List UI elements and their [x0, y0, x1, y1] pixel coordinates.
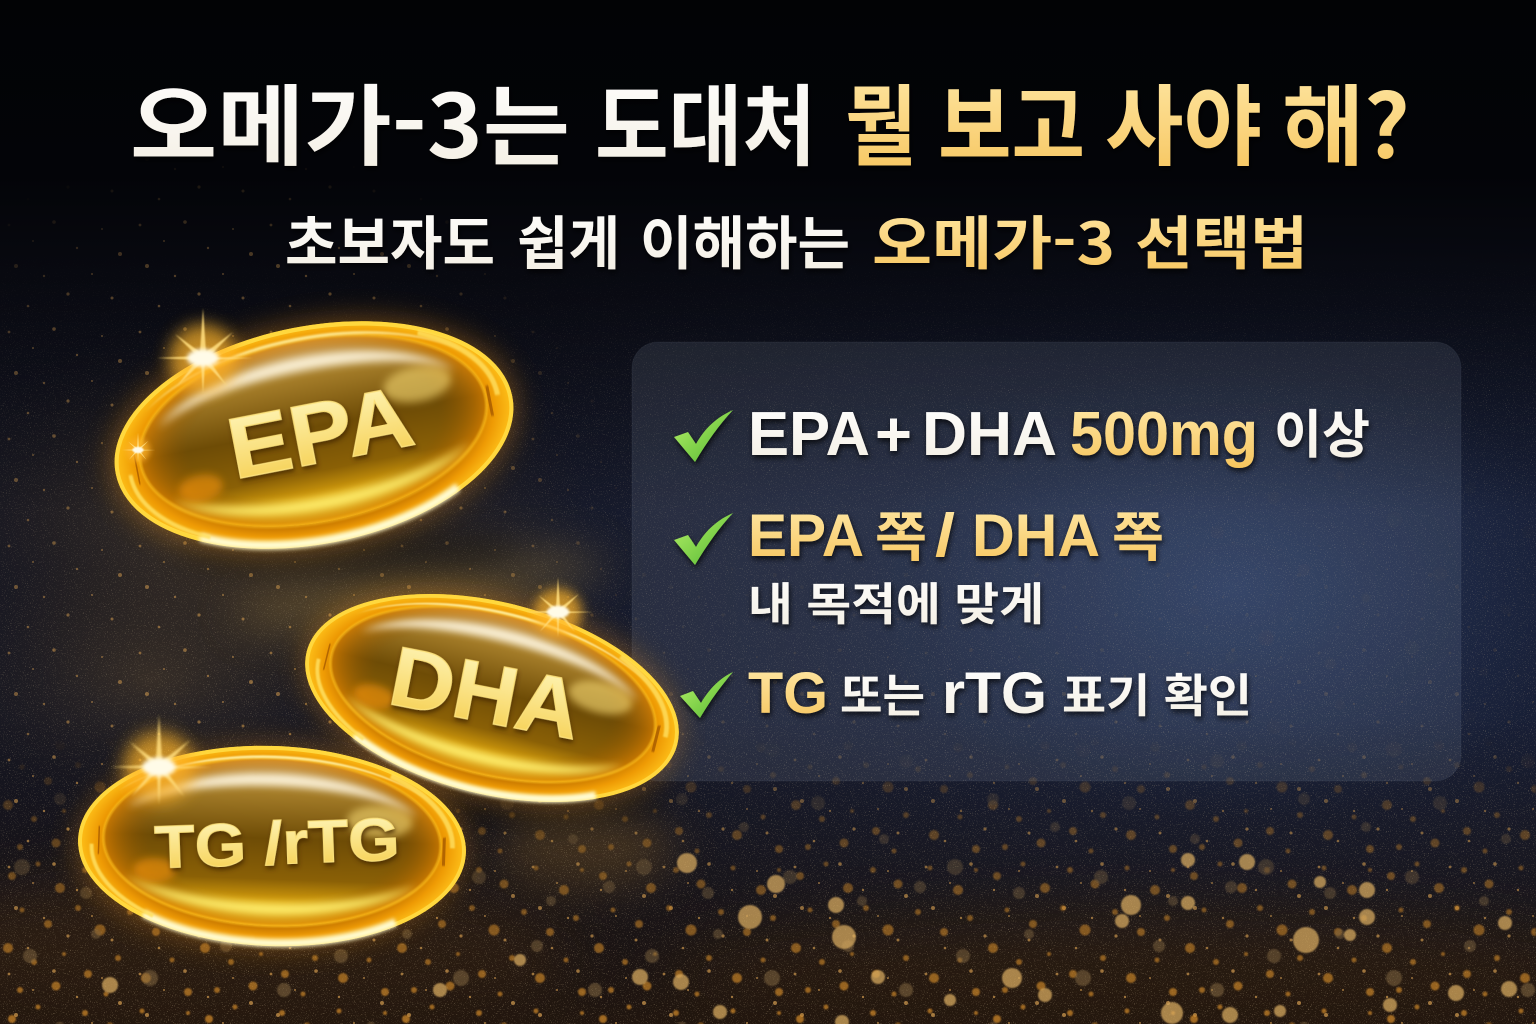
- title: 보고: [938, 57, 1085, 184]
- TG/rTG label: TG /rTG: [153, 806, 401, 881]
- checklist item 2: [674, 493, 1164, 633]
- checklist item 1: EPA: [748, 400, 870, 469]
- checklist item 3: 또는: [840, 660, 925, 726]
- subtitle: 초보자도: [285, 197, 495, 281]
- checklist item 3: [680, 660, 1252, 726]
- checklist item 1: [674, 393, 1370, 470]
- title: 사야: [1105, 57, 1262, 184]
- title: 뭘: [845, 57, 917, 184]
- checklist item 2: 내 목적에 맞게: [748, 568, 1044, 633]
- capsule: EPA: [95, 289, 533, 581]
- title: 오메가-3는: [130, 57, 570, 184]
- checklist item 3: rTG: [942, 661, 1047, 726]
- checklist item 2: 쪽: [1112, 493, 1164, 572]
- checklist item 2: /: [935, 502, 955, 569]
- checklist item 3: TG: [748, 661, 828, 726]
- subtitle: 쉽게: [517, 197, 620, 281]
- capsule: TG/rTG: [75, 739, 469, 953]
- icon: check mark: [674, 410, 733, 462]
- checklist item 3: 표기 확인: [1062, 660, 1252, 726]
- capsule shadows and glow: [77, 286, 701, 948]
- title: [130, 57, 1410, 184]
- icon: check mark: [674, 513, 733, 565]
- capsule: DHA: [283, 559, 701, 837]
- icon: check mark: [680, 672, 733, 718]
- subtitle: 오메가-3: [872, 197, 1115, 281]
- subtitle: [285, 197, 1308, 281]
- sparkles: [111, 308, 593, 805]
- panel: checklist card: [632, 342, 1461, 781]
- checklist item 2: DHA: [972, 502, 1100, 569]
- DHA label: DHA: [383, 629, 589, 757]
- EPA label: EPA: [220, 368, 421, 498]
- checklist item 1: 이상: [1274, 393, 1370, 468]
- subtitle: 이해하는: [640, 197, 850, 281]
- checklist item 1: DHA: [922, 400, 1057, 469]
- title: 해?: [1282, 57, 1410, 184]
- checklist item 2: 쪽: [875, 493, 927, 572]
- subtitle: 선택법: [1135, 197, 1308, 281]
- checklist item 1: +: [875, 398, 912, 470]
- title: 도대처: [595, 57, 816, 184]
- checklist item 1: 500mg: [1070, 400, 1258, 469]
- checklist item 2: EPA: [748, 502, 864, 569]
